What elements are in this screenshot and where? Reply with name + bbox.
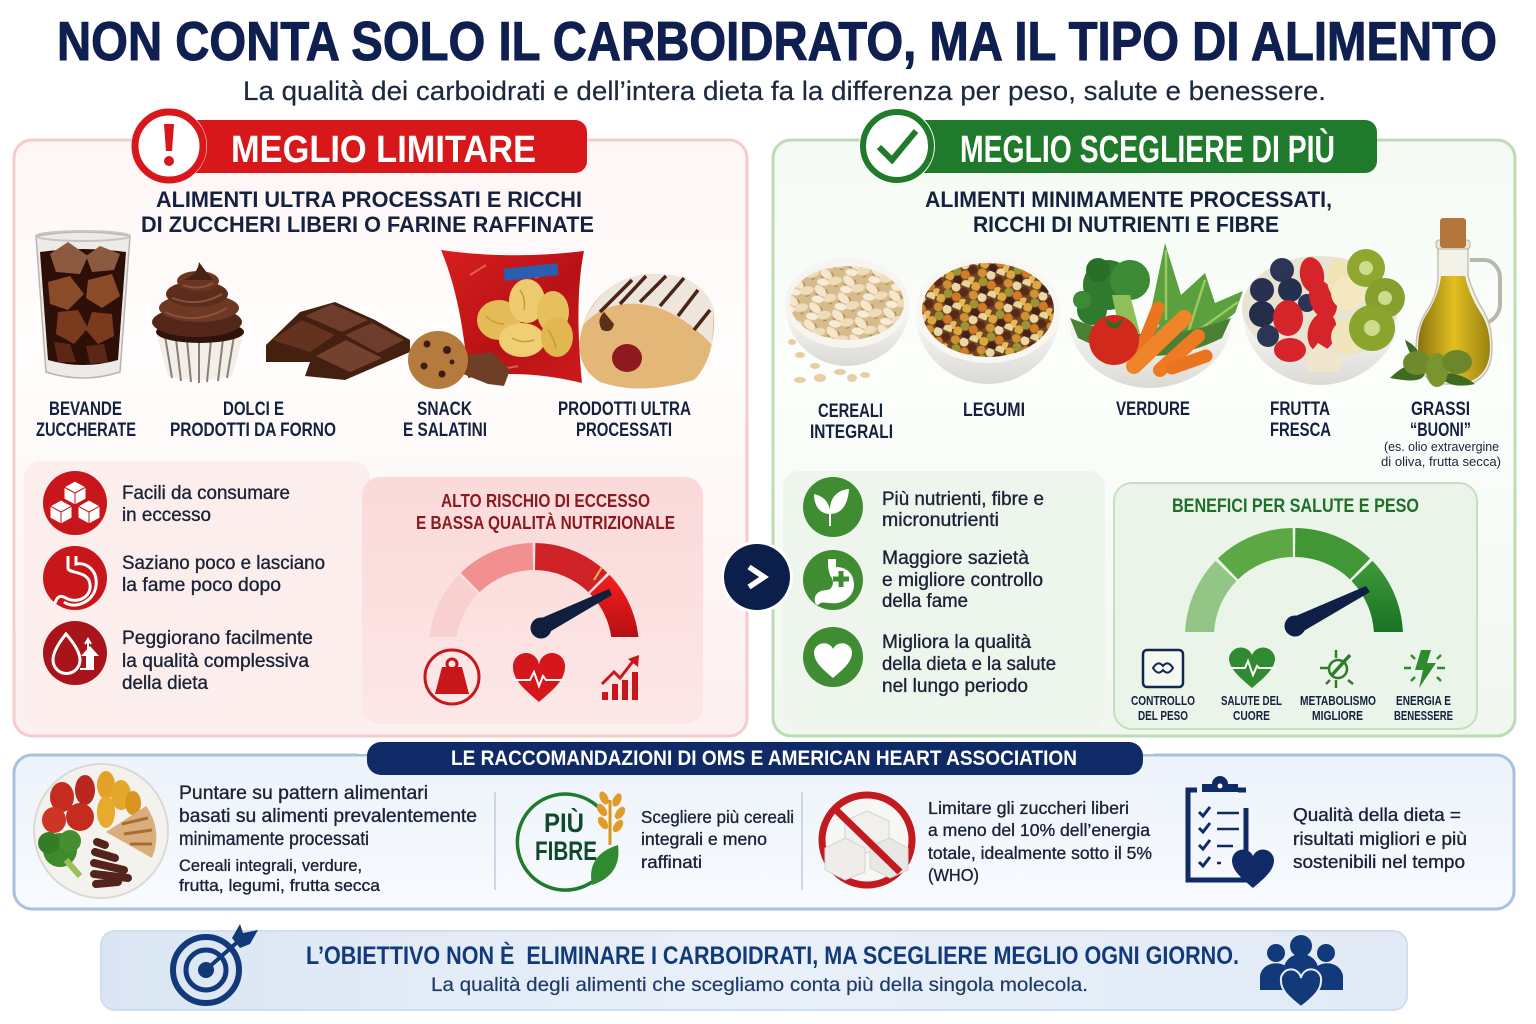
labels: food limit: BEVANDE (49, 399, 122, 420)
text: limit reasons: Saziano poco e lasciano (122, 553, 325, 574)
icon: stomach plus (803, 550, 863, 610)
text: limit reasons: Peggiorano facilmente (122, 628, 313, 649)
labels: benefits (1131, 694, 1453, 723)
subheading: ALIMENTI MINIMAMENTE PROCESSATI, (925, 187, 1332, 212)
panel: benefits gauge (1114, 483, 1477, 729)
text: minimally processed: Puntare su pattern alimentari (179, 783, 428, 804)
text: whole grains (641, 807, 794, 872)
labels: food choose: “BUONI” (1410, 420, 1471, 441)
icon: weight control (1143, 650, 1183, 687)
labels: food limit: DOLCI E (223, 399, 284, 420)
icon: piu fibre: FIBRE (535, 836, 597, 866)
labels: food choose: LEGUMI (963, 400, 1025, 421)
food: pastry (579, 274, 714, 389)
text: free sugars: (WHO) (928, 865, 979, 885)
heading: meglio limitare: MEGLIO LIMITARE (231, 129, 536, 171)
food: glass of cola (36, 231, 130, 378)
subheading: ALIMENTI ULTRA PROCESSATI E RICCHI (156, 187, 582, 212)
text: limit reasons: della dieta (122, 673, 208, 694)
food: cupcake (152, 262, 244, 383)
labels: food limit: PRODOTTI ULTRA (558, 399, 691, 420)
food: chips bag (441, 250, 584, 383)
subheading (925, 187, 1332, 237)
labels: food limit: SNACK (417, 399, 472, 420)
goal statement: L’OBIETTIVO NON È ELIMINARE I CARBOIDRATI, MA SCEGLIERE MEGLIO OGNI GIORNO. (306, 941, 1239, 970)
heading: meglio limitare (131, 108, 587, 184)
icon: metabolism (1320, 650, 1353, 688)
text: free sugars: Limitare gli zuccheri liberi (928, 798, 1129, 818)
text: limit reasons: la fame poco dopo (122, 575, 281, 596)
icon: piu fibre: PIÙ (544, 807, 584, 838)
icon: clipboard with heart (1188, 776, 1274, 888)
icon: energy (1404, 650, 1445, 688)
panel: recommendations (14, 738, 1514, 909)
food: chocolate (266, 302, 410, 380)
text: minimally processed: minimamente processati (179, 829, 369, 850)
text: choose reasons: della fame (882, 591, 968, 612)
food: cookie (408, 331, 510, 389)
text: choose reasons: Maggiore sazietà (882, 548, 1029, 569)
note: fats examples: (es. olio extravergine (1384, 439, 1499, 454)
text: whole grains: integrali e meno (641, 829, 767, 849)
icon: drop and arrows (43, 621, 107, 685)
icon: heart health (1229, 648, 1276, 688)
text: limit reasons: in eccesso (122, 505, 211, 526)
note: fats examples (1381, 439, 1501, 469)
food: olive oil bottle (1390, 218, 1500, 387)
icon: sugar cubes (43, 471, 107, 535)
labels: food limit: PROCESSATI (576, 420, 672, 441)
benefits gauge chart (1199, 542, 1389, 637)
panel: limit reasons (24, 461, 370, 728)
text: choose reasons: della dieta e la salute (882, 654, 1056, 675)
labels: benefits: CONTROLLO (1131, 694, 1195, 708)
labels: benefits: MIGLIORE (1312, 709, 1363, 723)
text: free sugars: a meno del 10% dell’energia (928, 820, 1150, 840)
icon: rising chart (602, 655, 639, 700)
text: choose reasons: e migliore controllo (882, 570, 1043, 591)
panel: bottom goal (101, 924, 1407, 1010)
text: diet quality: sostenibili nel tempo (1293, 852, 1465, 872)
labels: benefits: DEL PESO (1138, 709, 1188, 723)
labels: benefits: METABOLISMO (1300, 694, 1376, 708)
food: fruit bowl (1242, 249, 1405, 385)
text: choose reasons: nel lungo periodo (882, 676, 1028, 697)
text: diet quality: Qualità della dieta = (1293, 805, 1461, 825)
risk title: ALTO RISCHIO DI ECCESSO (441, 491, 650, 511)
text: minimally processed: frutta, legumi, frutta secca (179, 876, 381, 895)
text: choose reasons: Più nutrienti, fibre e (882, 489, 1044, 510)
panel: choose reasons (783, 471, 1105, 727)
recommendations heading: LE RACCOMANDAZIONI DI OMS E AMERICAN HEART ASSOCIATION (451, 747, 1077, 770)
labels: benefits: ENERGIA E (1396, 694, 1451, 708)
labels: food choose: FRESCA (1270, 420, 1331, 441)
goal subtext: La qualità degli alimenti che scegliamo conta più della singola molecola. (431, 974, 1088, 996)
text: minimally processed: Cereali integrali, verdure, (179, 856, 362, 875)
labels: food choose: VERDURE (1116, 399, 1190, 420)
panel: meglio limitare (14, 108, 747, 736)
subheading (141, 187, 594, 237)
food: legumes bowl (915, 257, 1060, 384)
labels: food limit: ZUCCHERATE (36, 420, 136, 441)
text: diet quality: risultati migliori e più (1293, 829, 1467, 849)
panel: risk gauge (362, 477, 703, 724)
icon: stomach (43, 546, 107, 610)
text: choose reasons: micronutrienti (882, 510, 999, 531)
text: limit reasons: Facili da consumare (122, 483, 290, 504)
labels: food choose: GRASSI (1411, 399, 1470, 420)
heading: meglio scegliere: MEGLIO SCEGLIERE DI PIÙ (960, 127, 1335, 171)
labels: food limit (36, 399, 691, 441)
icon: sprout (803, 477, 863, 537)
text: whole grains: Scegliere più cereali (641, 807, 794, 827)
recommendations heading (367, 742, 1143, 775)
icon: people with heart (1260, 935, 1343, 1007)
text: free sugars (928, 798, 1152, 885)
text: choose reasons (882, 489, 1056, 697)
labels: food choose: CEREALI (818, 401, 883, 422)
icon: piu fibre (517, 790, 627, 890)
labels: benefits: SALUTE DEL (1221, 694, 1282, 708)
risk gauge chart (442, 556, 626, 648)
risk title: E BASSA QUALITÀ NUTRIZIONALE (416, 512, 675, 533)
labels: food choose: INTEGRALI (810, 422, 893, 443)
icon: healthy plate (34, 764, 168, 898)
subheading: DI ZUCCHERI LIBERI O FARINE RAFFINATE (141, 212, 594, 237)
icon: weight (425, 650, 479, 704)
text: whole grains: raffinati (641, 852, 702, 872)
heading: meglio scegliere (859, 108, 1377, 184)
labels: benefits: CUORE (1233, 709, 1270, 723)
risk title (416, 491, 675, 533)
labels: food limit: PRODOTTI DA FORNO (170, 420, 336, 441)
benefits title: BENEFICI PER SALUTE E PESO (1172, 496, 1419, 517)
subtitle: La qualità dei carboidrati e dell’intera dieta fa la differenza per peso, salute e benessere. (243, 76, 1326, 106)
arrow: from limit to choose (721, 541, 793, 613)
text: limit reasons (122, 483, 325, 694)
text: diet quality (1293, 805, 1467, 872)
panel: meglio scegliere (773, 108, 1515, 736)
note: fats examples: di oliva, frutta secca) (1381, 454, 1501, 469)
labels: food choose (810, 399, 1471, 443)
icon: heart pulse (513, 653, 565, 702)
text: minimally processed: basati su alimenti prevalentemente (179, 806, 477, 827)
food: whole grains bowl (785, 258, 910, 383)
food: vegetables bowl (1068, 243, 1243, 388)
subheading: RICCHI DI NUTRIENTI E FIBRE (973, 212, 1279, 237)
text: free sugars: totale, idealmente sotto il 5% (928, 843, 1152, 863)
icon: target (173, 924, 258, 1003)
labels: benefits: BENESSERE (1394, 709, 1453, 723)
text: limit reasons: la qualità complessiva (122, 651, 309, 672)
text: minimally processed (179, 783, 477, 895)
icon: no sugar (822, 795, 912, 885)
text: choose reasons: Migliora la qualità (882, 632, 1031, 653)
labels: food choose: FRUTTA (1270, 399, 1330, 420)
labels: food limit: E SALATINI (403, 420, 487, 441)
icon: heart (803, 627, 863, 687)
